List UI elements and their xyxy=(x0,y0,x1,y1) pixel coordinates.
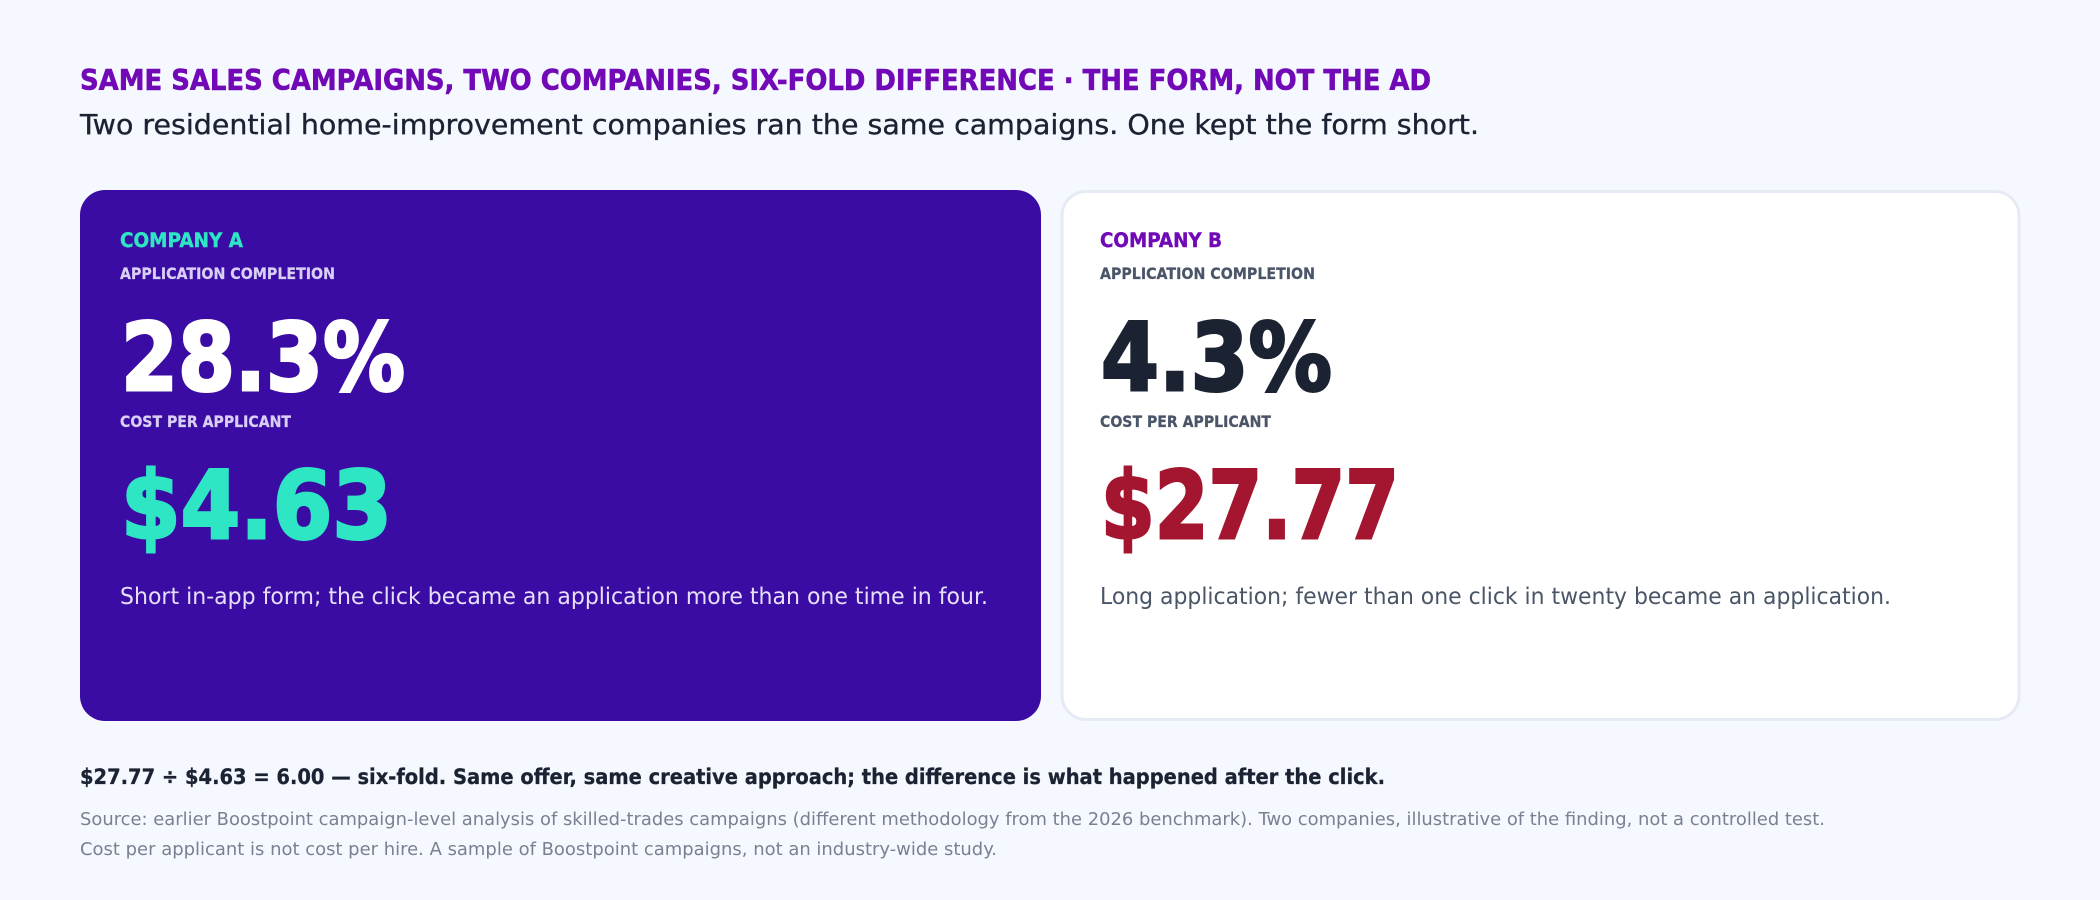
panel: company A xyxy=(80,190,1041,721)
company B name: COMPANY B xyxy=(1100,229,1222,252)
description A: Short in-app form; the click became an application more than one time in four. xyxy=(120,582,988,610)
label: cost per applicant: COST PER APPLICANT xyxy=(1100,412,1271,431)
label: cost per applicant: COST PER APPLICANT xyxy=(120,412,291,431)
metric: $27.77: $27.77 xyxy=(1101,452,1399,561)
metric: $4.63: $4.63 xyxy=(121,452,392,561)
takeaway: $27.77 ÷ $4.63 = 6.00 — six-fold. Same offer, same creative approach; the difference is what happened after the click. xyxy=(80,765,1385,790)
panel A background xyxy=(80,190,1041,721)
company A name: COMPANY A xyxy=(120,229,243,252)
source line 2: Cost per applicant is not cost per hire. A sample of Boostpoint campaigns, not an industry-wide study. xyxy=(80,840,997,860)
panel: company B xyxy=(1062,192,2019,720)
panel B background xyxy=(1062,192,2019,720)
description B: Long application; fewer than one click in twenty became an application. xyxy=(1100,582,1891,610)
source line 1: Source: earlier Boostpoint campaign-level analysis of skilled-trades campaigns (different methodology from the 2026 benchmark). Two companies, illustrative of the finding, not a controlled test. xyxy=(80,810,1825,830)
label: application completion: APPLICATION COMPLETION xyxy=(1100,264,1315,283)
metric: 28.3%: 28.3% xyxy=(121,304,405,413)
title: SAME SALES CAMPAIGNS, TWO COMPANIES, SIX-FOLD DIFFERENCE · THE FORM, NOT THE AD xyxy=(80,64,1431,97)
label: application completion: APPLICATION COMPLETION xyxy=(120,264,335,283)
subtitle: Two residential home-improvement companies ran the same campaigns. One kept the form short. xyxy=(79,109,1479,141)
source notes xyxy=(80,810,1825,860)
metric: 4.3%: 4.3% xyxy=(1101,304,1332,413)
